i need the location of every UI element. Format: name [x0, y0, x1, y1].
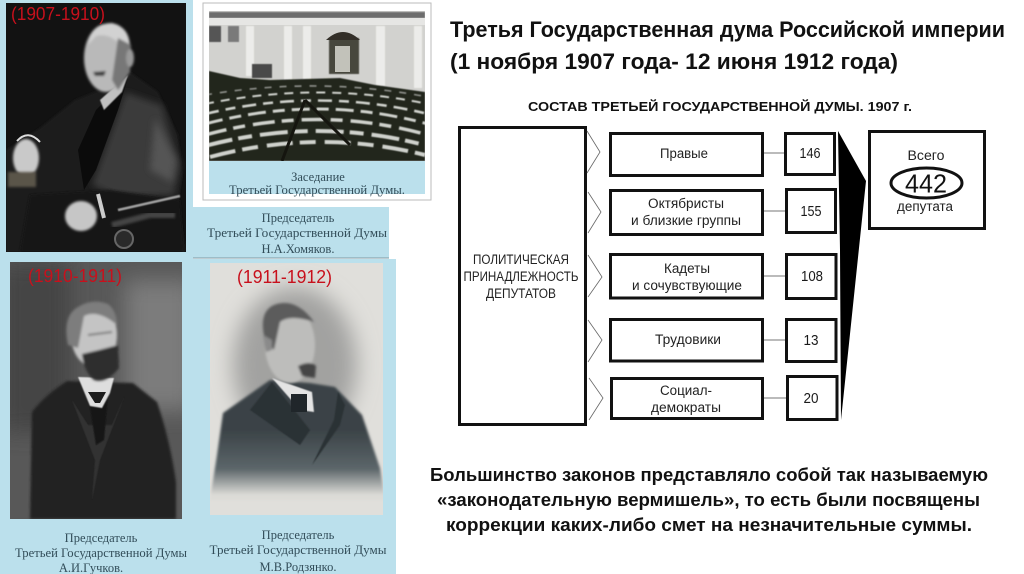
photo: chairman Khomyakov	[6, 3, 186, 252]
row: Кадеты	[610, 254, 836, 298]
row: Октябристы: Октябристы	[648, 196, 724, 211]
label: years 1911-1912: (1911-1912)	[237, 267, 332, 287]
box: political affiliation: ПРИНАДЛЕЖНОСТЬ	[464, 269, 579, 284]
row: Социал-демократы: демократы	[651, 400, 721, 415]
row: Трудовики: Трудовики	[655, 332, 721, 347]
caption: Rodzyanko: Третьей Государственной Думы	[210, 543, 387, 557]
photo: session hall	[205, 11, 428, 161]
caption: session: Третьей Государственной Думы.	[229, 183, 405, 197]
title: (1 ноября 1907 года- 12 июня 1912 года)	[450, 49, 898, 74]
row: Октябристы	[610, 190, 836, 234]
title	[450, 17, 1005, 74]
row: Социал-демократы: Социал-	[660, 383, 712, 398]
row: Правые: 146	[800, 146, 820, 162]
caption: Rodzyanko: М.В.Родзянко.	[260, 560, 336, 574]
box: total deputies: 442	[905, 168, 947, 198]
caption: Rodzyanko: Председатель	[262, 528, 335, 542]
box: total deputies: депутата	[897, 199, 953, 214]
text block: conclusion: коррекции каких-либо смет на незначительные суммы.	[446, 515, 972, 535]
text block: conclusion	[430, 465, 988, 535]
title: Третья Государственная дума Российской империи	[450, 17, 1005, 42]
caption: Guchkov: Председатель	[65, 531, 138, 545]
text block: conclusion: «законодательную вермишель», то есть были посвящены	[437, 490, 980, 510]
arrows to party boxes	[587, 131, 603, 420]
caption: session: Заседание	[291, 170, 345, 184]
label: years 1910-1911: (1910-1911)	[28, 266, 122, 286]
label: years 1907-1910: (1907-1910)	[11, 4, 105, 24]
photo: chairman Rodzyanko	[210, 263, 385, 515]
caption: Khomyakov	[193, 207, 389, 258]
caption: session	[209, 161, 425, 197]
row: Правые	[610, 134, 834, 176]
box: political affiliation	[460, 128, 586, 424]
caption: Khomyakov: Н.А.Хомяков.	[262, 242, 334, 256]
row: Социал-демократы: 20	[804, 391, 818, 407]
box: total deputies: Всего	[908, 148, 944, 163]
row: Правые: Правые	[660, 146, 708, 161]
connectors to numbers	[764, 153, 786, 398]
diagram: composition of the Duma	[460, 128, 984, 424]
row: Трудовики	[610, 320, 836, 362]
text block: conclusion: Большинство законов представляло собой так называемую	[430, 465, 988, 485]
row: Октябристы: 155	[800, 204, 822, 220]
blue background behind portraits	[0, 0, 396, 574]
row: Кадеты: Кадеты	[664, 261, 710, 276]
row: Кадеты: и сочувствующие	[632, 278, 742, 293]
photo: chairman Guchkov	[10, 262, 182, 519]
box: political affiliation: ПОЛИТИЧЕСКАЯ	[473, 252, 569, 267]
caption: Rodzyanko	[210, 528, 387, 574]
row: Трудовики: 13	[804, 333, 818, 349]
box: political affiliation: ДЕПУТАТОВ	[486, 286, 556, 301]
box: total deputies	[870, 132, 984, 228]
diagram heading: СОСТАВ ТРЕТЬЕЙ ГОСУДАРСТВЕННОЙ ДУМЫ. 1907 г.	[528, 99, 912, 114]
caption: Khomyakov: Третьей Государственной Думы	[207, 226, 388, 240]
row: Кадеты: 108	[801, 269, 823, 285]
caption: Guchkov: Третьей Государственной Думы	[15, 546, 188, 560]
row: Октябристы: и близкие группы	[631, 213, 741, 228]
row: Социал-демократы	[612, 376, 837, 420]
arrow: black wedge to total	[838, 131, 866, 420]
panel: Duma session photo	[203, 3, 431, 200]
caption: Khomyakov: Председатель	[262, 211, 335, 225]
caption: Guchkov	[15, 531, 188, 574]
